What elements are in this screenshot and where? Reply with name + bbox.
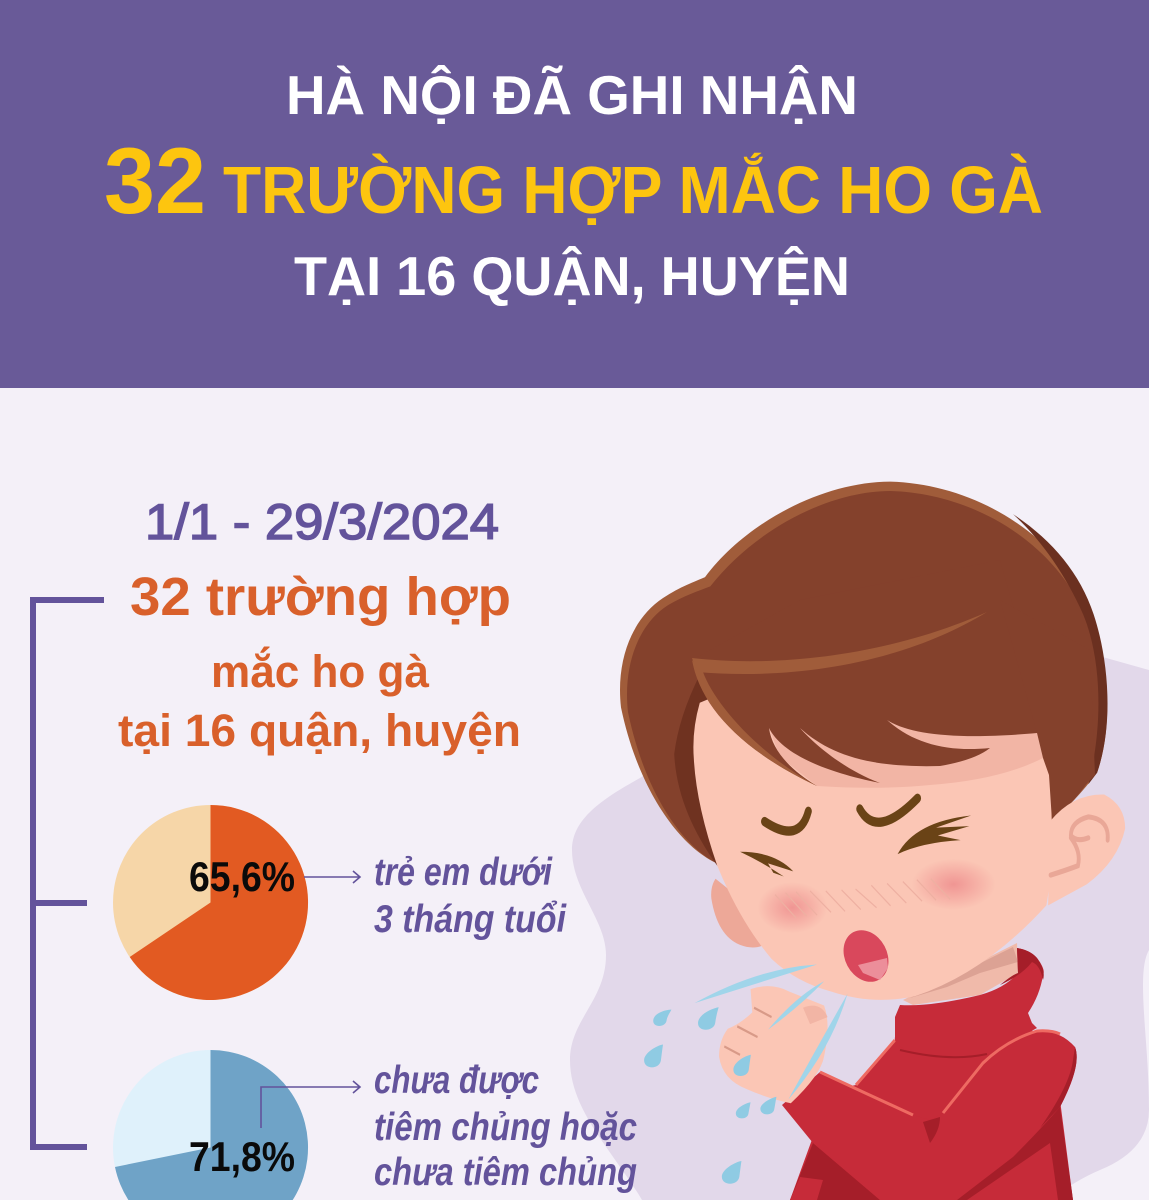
case count heading	[118, 567, 521, 756]
right eye	[898, 815, 971, 854]
label: 65,6%: 3 tháng tuổi	[374, 898, 567, 941]
label: 71,8%: tiêm chủng hoặc	[374, 1106, 637, 1149]
cough spray	[695, 964, 848, 1099]
arrow: 65,6%	[304, 871, 360, 883]
droplets	[644, 1007, 776, 1184]
label: 65,6%: trẻ em dưới	[374, 851, 553, 894]
sleeve arm	[782, 1031, 1077, 1200]
left eyebrow	[765, 811, 808, 831]
forehead shadow	[769, 700, 1043, 788]
head back	[620, 482, 1108, 1000]
background blob	[570, 600, 1149, 1200]
date heading: 1/1 - 29/3/2024	[145, 494, 499, 550]
cheek blush right	[912, 859, 996, 910]
hair underside shadow	[674, 675, 747, 866]
case description: tại 16 quận, huyện	[118, 705, 521, 756]
title line 1: HÀ NỘI ĐÃ GHI NHẬN	[286, 64, 858, 126]
label: 65,6%	[374, 851, 567, 941]
title line 2: TRƯỜNG HỢP MẮC HO GÀ	[223, 153, 1043, 228]
cheek blush left	[758, 882, 828, 933]
hand	[719, 986, 828, 1103]
hair right rim	[1013, 514, 1108, 784]
far ear	[711, 879, 762, 947]
label: 71,8%	[374, 1059, 637, 1194]
pie chart: 65,6%	[113, 805, 308, 1000]
hair highlight	[692, 612, 987, 674]
turtleneck collar	[895, 948, 1044, 1057]
case description	[118, 646, 521, 756]
title line 3: TẠI 16 QUẬN, HUYỆN	[294, 245, 850, 307]
header banner	[0, 0, 1149, 388]
title line 2	[104, 128, 1043, 233]
ear detail	[1051, 817, 1108, 875]
near ear	[1048, 794, 1125, 905]
face	[693, 656, 1052, 1000]
mouth	[835, 922, 897, 990]
title line 2: 32	[104, 128, 206, 233]
bracket connector	[33, 600, 104, 1147]
label: 71,8%: chưa được	[374, 1059, 539, 1102]
left eye	[740, 852, 793, 876]
sideburn	[1000, 600, 1095, 821]
hair fringe	[692, 560, 1040, 786]
illustration: coughing boy	[620, 482, 1125, 1200]
hair back	[620, 482, 1107, 863]
pie chart: 71,8%	[113, 1050, 308, 1200]
label: 71,8%: chưa tiêm chủng	[374, 1151, 637, 1194]
fringe rim	[692, 660, 817, 786]
right eyebrow	[860, 798, 918, 822]
neck	[903, 943, 1018, 1005]
case count heading: 32 trường hợp	[130, 567, 511, 627]
case description: mắc ho gà	[211, 646, 430, 697]
blush hatching	[775, 879, 950, 918]
value label: 65,6%	[189, 853, 295, 900]
arrow: 71,8%	[261, 1081, 360, 1128]
hand and spray	[644, 964, 848, 1184]
value label: 71,8%	[189, 1133, 295, 1180]
sweater body	[790, 1025, 1073, 1200]
face details	[740, 794, 1125, 933]
